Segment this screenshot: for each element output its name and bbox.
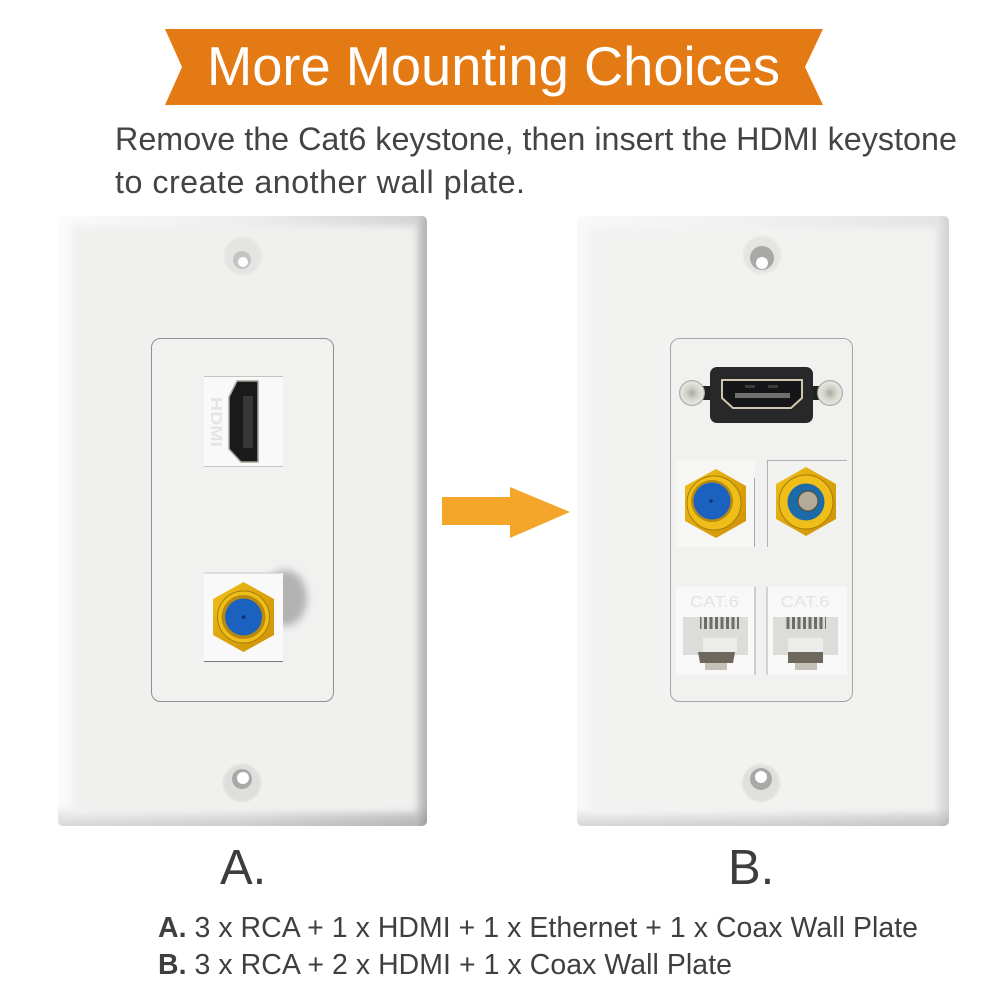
instruction text: Remove the Cat6 keystone, then insert the HDMI keystone [115, 121, 957, 157]
option list [158, 912, 918, 981]
inset panel A [152, 338, 334, 702]
option list: A. 3 x RCA + 1 x HDMI + 1 x Ethernet + 1 x Coax Wall Plate [158, 912, 918, 944]
HDMI port with screws B [679, 367, 843, 423]
coax keystone B left [676, 460, 755, 547]
screw hole top B [743, 236, 781, 274]
arrow [442, 487, 570, 538]
coax keystone B right [767, 460, 847, 547]
label A: A. [220, 841, 266, 895]
Cat6 keystone B right [767, 587, 847, 675]
option list: B. 3 x RCA + 2 x HDMI + 1 x Coax Wall Plate [158, 949, 732, 981]
title banner: More Mounting Choices [207, 36, 780, 97]
HDMI keystone A [204, 376, 283, 466]
wall plate A [58, 216, 427, 826]
label B: B. [728, 841, 774, 895]
instruction text [115, 121, 957, 200]
inset panel B [670, 338, 852, 702]
screw hole bottom A [223, 764, 261, 802]
screw hole top A [224, 237, 262, 275]
screw hole bottom B [742, 764, 780, 802]
HDMI keystone A: HDMI [207, 397, 224, 447]
wall plate B [577, 216, 949, 826]
Cat6 keystone B right: CAT.6 [780, 594, 830, 611]
coax keystone A [204, 570, 307, 662]
instruction text: to create another wall plate. [115, 164, 525, 200]
Cat6 keystone B left [676, 587, 755, 675]
Cat6 keystone B left: CAT.6 [690, 594, 739, 611]
